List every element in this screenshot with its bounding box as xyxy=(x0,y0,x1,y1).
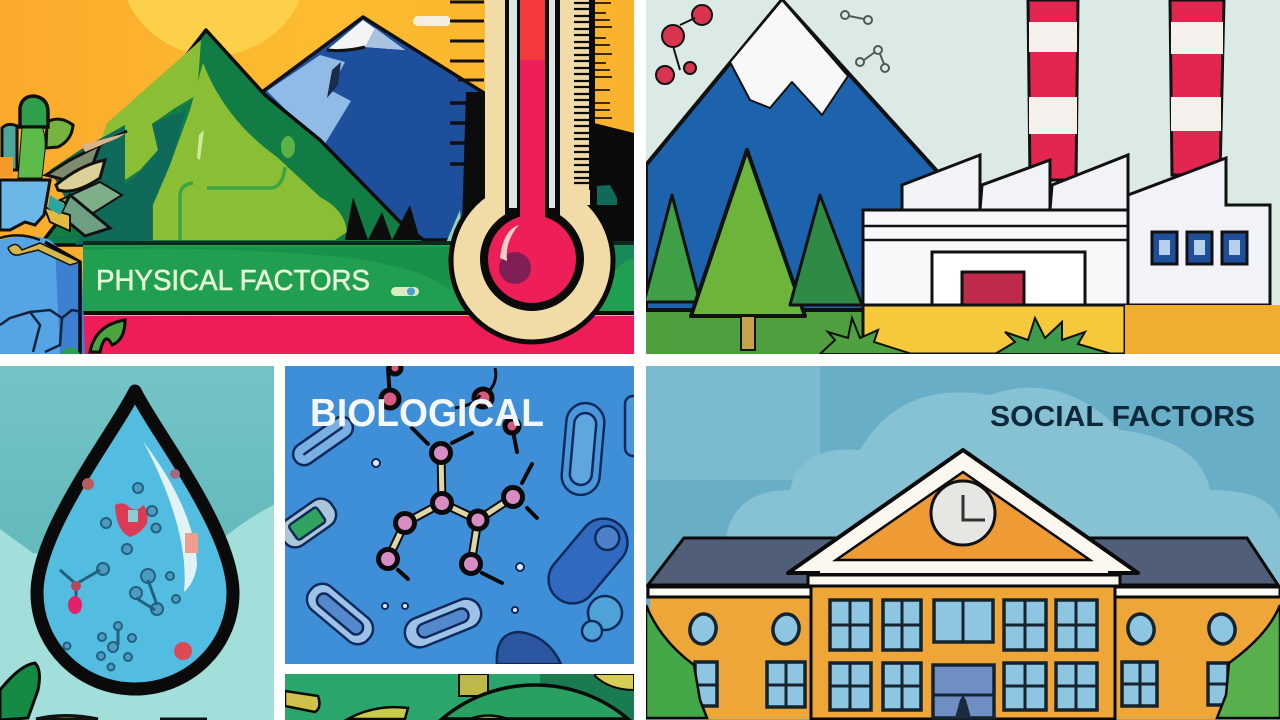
cactus xyxy=(2,124,17,170)
pill marks xyxy=(391,287,419,296)
icon: microbes xyxy=(275,396,641,664)
icon: thermometer xyxy=(451,0,613,342)
panel: biological factors xyxy=(275,362,641,664)
windows xyxy=(687,600,1238,718)
icon: molecules xyxy=(656,5,712,84)
icon: snow mountain xyxy=(646,0,945,310)
panel: water xyxy=(0,366,277,720)
icon: potted plant and rocks xyxy=(0,96,127,354)
icon: green mountain xyxy=(40,30,430,245)
heading: physical factors: PHYSICAL FACTORS xyxy=(96,265,370,297)
green band xyxy=(83,243,634,313)
heading: social factors: SOCIAL FACTORS xyxy=(990,401,1255,433)
heading: biological: BIOLOGICAL xyxy=(310,392,544,435)
red band xyxy=(83,316,634,354)
icon: molecule xyxy=(378,362,537,583)
clouds xyxy=(725,388,1280,600)
panel: industrial factors xyxy=(644,0,1280,354)
panel: plants strip xyxy=(285,674,634,720)
icon: chimneys xyxy=(1028,0,1224,180)
pot xyxy=(0,180,50,230)
icon: pine trees xyxy=(644,150,862,350)
bushes xyxy=(646,605,707,718)
panel: physical factors xyxy=(0,0,634,354)
rock xyxy=(0,236,85,354)
trees silhouette xyxy=(345,197,420,240)
icon: factory xyxy=(820,155,1280,354)
panel: social factors xyxy=(646,366,1280,720)
icon: blue mountain xyxy=(262,17,486,240)
leaves xyxy=(46,131,127,185)
icon: water drop xyxy=(37,391,233,689)
icon: school building xyxy=(646,450,1280,719)
black hill xyxy=(590,122,634,250)
icon: clock xyxy=(931,481,995,545)
